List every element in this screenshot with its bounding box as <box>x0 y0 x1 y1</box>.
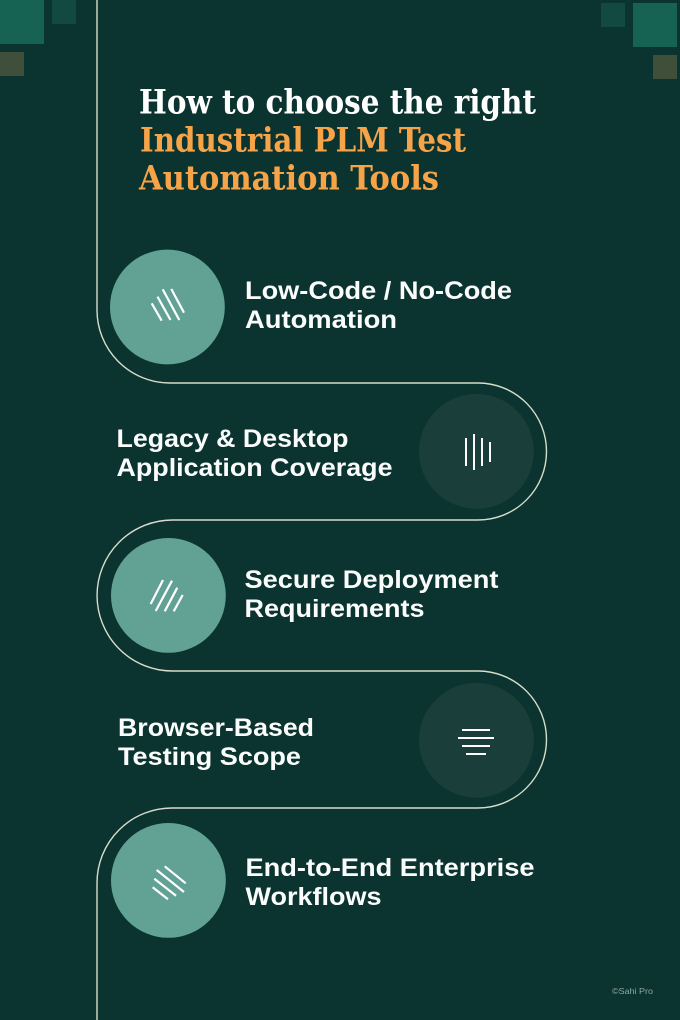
winding connector line <box>97 0 546 1020</box>
icon: slanted lines in teal circle <box>111 823 226 938</box>
label <box>245 277 512 334</box>
copyright credit: ©Sahi Pro <box>612 986 653 996</box>
icon: horizontal bars in dark circle <box>419 683 534 798</box>
title <box>138 82 536 198</box>
step 4: browser-based testing <box>118 683 534 798</box>
icon: slanted lines in teal circle <box>110 250 225 364</box>
label: Automation <box>245 306 397 334</box>
title: Automation Tools <box>138 158 439 198</box>
step 3: secure deployment <box>111 538 499 653</box>
icon: vertical bars in dark circle <box>419 394 534 509</box>
icon: slanted lines in teal circle <box>111 538 226 653</box>
label <box>118 714 314 771</box>
label: Testing Scope <box>118 743 301 771</box>
step 5: end-to-end workflows <box>111 823 535 938</box>
label <box>244 566 499 623</box>
label: Legacy & Desktop <box>116 425 348 453</box>
title: How to choose the right <box>139 82 536 122</box>
label: Requirements <box>244 595 424 623</box>
label <box>246 854 535 911</box>
step 1: low-code / no-code <box>110 250 512 364</box>
label: Application Coverage <box>116 454 393 482</box>
label: Secure Deployment <box>244 566 499 594</box>
label: End-to-End Enterprise <box>246 854 535 882</box>
step 2: legacy and desktop <box>116 394 534 509</box>
label <box>116 425 393 482</box>
label: Low-Code / No-Code <box>245 277 512 305</box>
decorative squares: top right <box>601 3 677 79</box>
decorative squares: top left <box>0 0 76 76</box>
label: Browser-Based <box>118 714 314 742</box>
label: Workflows <box>246 883 382 911</box>
title: Industrial PLM Test <box>140 120 466 160</box>
